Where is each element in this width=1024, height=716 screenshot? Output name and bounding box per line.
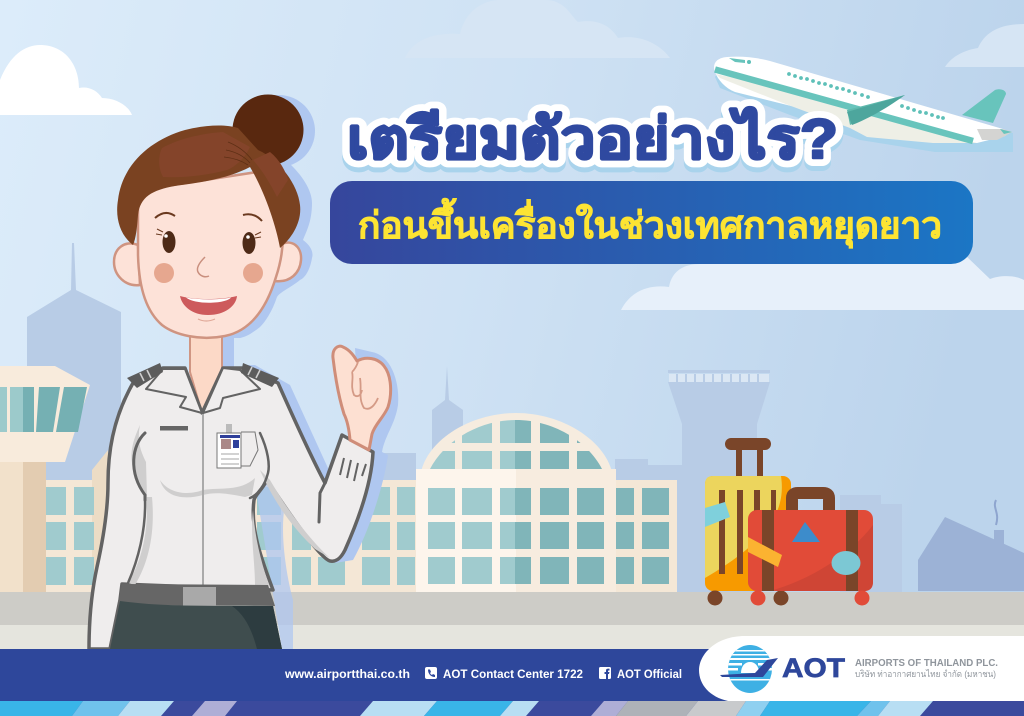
- dome: [421, 413, 612, 472]
- cuff lines: [340, 458, 366, 481]
- skirt: [110, 601, 282, 649]
- clouds: [0, 0, 1024, 310]
- icon: facebook: [599, 667, 611, 679]
- thumbs-up hand: [333, 346, 391, 450]
- title heading: เตรียมตัวอย่างไร?: [347, 111, 838, 175]
- shirt: [89, 368, 373, 649]
- icon: phone: [425, 667, 437, 679]
- website: www.airportthai.co.th: [284, 667, 410, 681]
- character: airport staff woman: [89, 94, 398, 649]
- title heading: เตรียมตัวอย่างไร?: [347, 106, 838, 170]
- central hall: [416, 469, 616, 592]
- footer band: [0, 649, 1024, 716]
- control tower left: [0, 366, 90, 592]
- terminal windows: [39, 487, 415, 585]
- belt buckle: [183, 587, 216, 607]
- right ear: [275, 243, 301, 281]
- mouth: [180, 296, 237, 321]
- neck: [190, 332, 222, 413]
- shirt inner lines: [128, 433, 325, 583]
- staff id card: [217, 424, 258, 468]
- luggage: [705, 438, 873, 606]
- bun: [232, 94, 304, 166]
- ground: [0, 592, 1024, 650]
- name tag: [160, 426, 188, 430]
- company name: AIRPORTS OF THAILAND PLC.: [855, 658, 998, 669]
- facebook page: AOT Official: [617, 667, 682, 681]
- hair: [117, 126, 300, 248]
- AOT globe logo: [720, 645, 778, 693]
- background skyline: [27, 243, 902, 592]
- character shadow: [222, 95, 398, 649]
- shirt shading: [128, 425, 330, 588]
- collar: [146, 368, 260, 413]
- placket: [202, 413, 204, 586]
- red suitcase: [748, 493, 873, 606]
- subtitle banner: [330, 181, 973, 264]
- eyes: [155, 213, 262, 254]
- subtitle banner: ก่อนขึ้นเครื่องในช่วงเทศกาลหยุดยาว: [358, 198, 942, 249]
- house silhouette with chimney: [918, 500, 1024, 591]
- nose: [197, 257, 209, 277]
- airplane: [714, 57, 1013, 152]
- yellow suitcase: [705, 438, 791, 606]
- airport terminal: [31, 413, 677, 592]
- AOT wordmark: AOT: [782, 653, 846, 683]
- company name thai: บริษัท ท่าอากาศยานไทย จำกัด (มหาชน): [855, 669, 996, 679]
- footer stripes: [0, 701, 1024, 716]
- cheeks: [154, 263, 263, 283]
- face: [138, 170, 283, 338]
- belt: [118, 584, 275, 606]
- left ear: [114, 244, 140, 285]
- epaulettes: [127, 363, 279, 388]
- contact center: AOT Contact Center 1722: [443, 667, 583, 681]
- title heading: เตรียมตัวอย่างไร?: [347, 106, 838, 170]
- logo panel: [699, 636, 1024, 701]
